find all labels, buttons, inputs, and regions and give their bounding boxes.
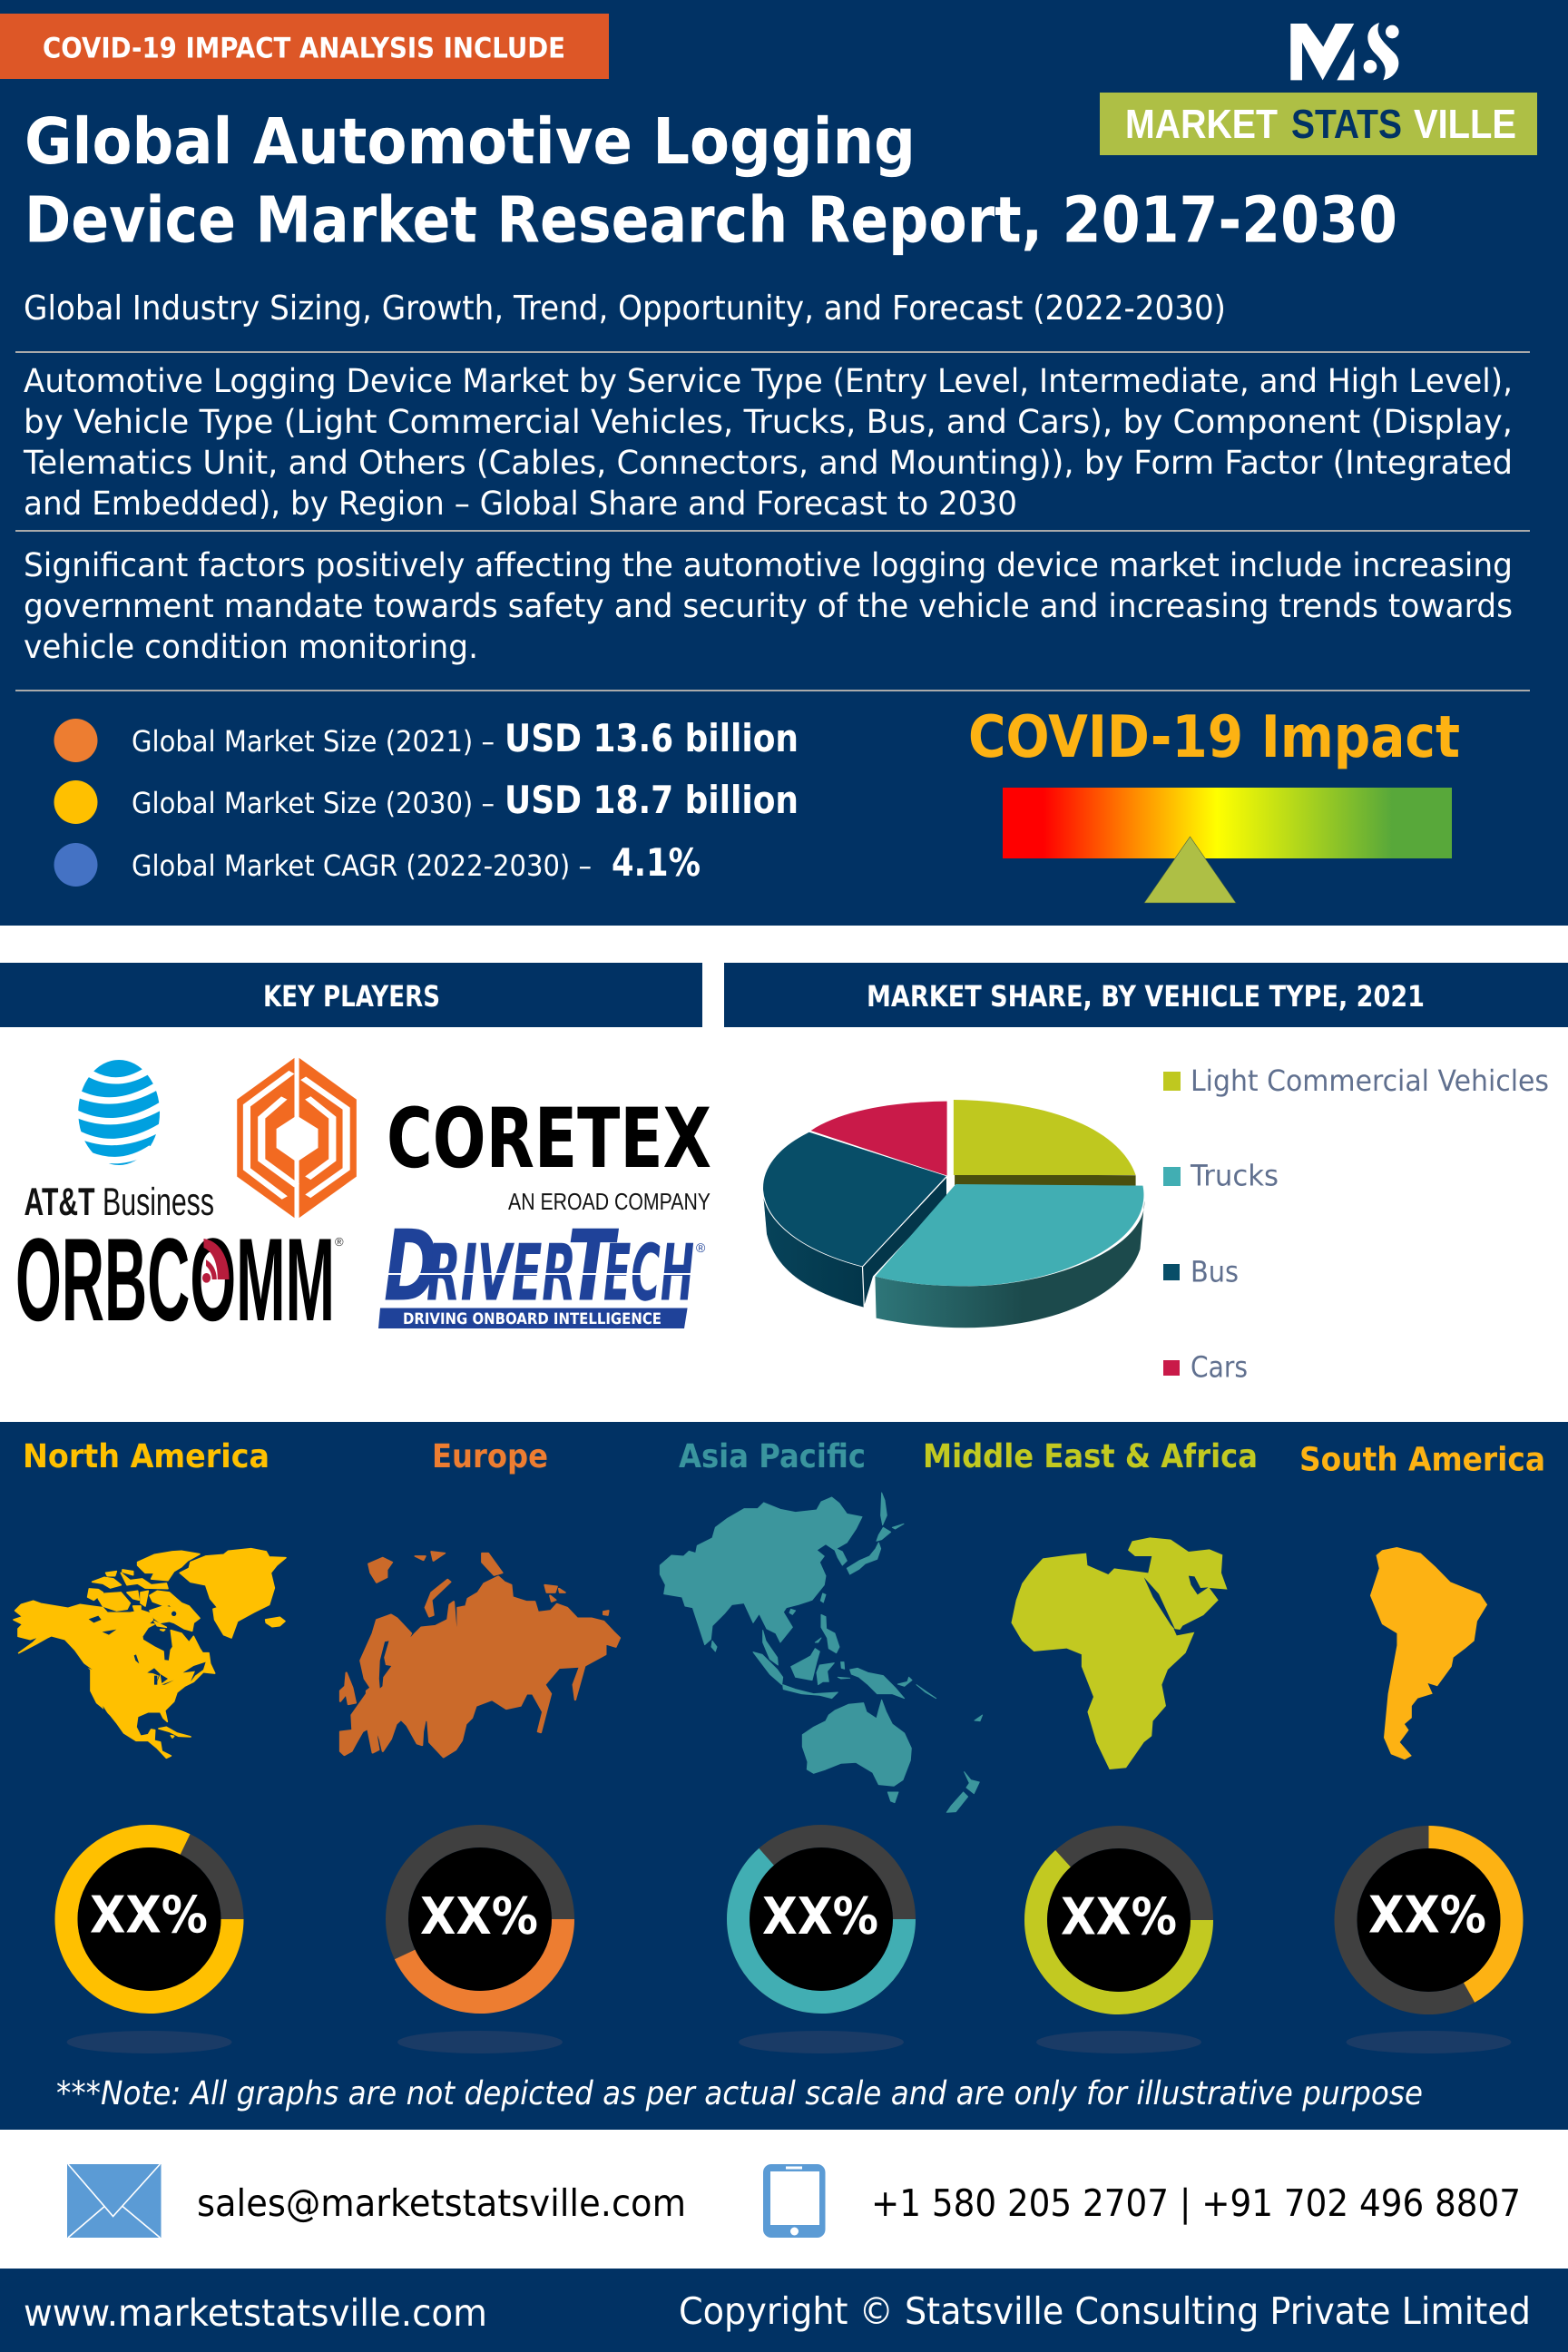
AT&T wordmark: AT&T (24, 1181, 94, 1224)
stat: market size 2030: USD 18.7 billion (505, 778, 799, 822)
text block: market drivers: vehicle condition monitoring. (24, 629, 478, 666)
label: South America: South America (1299, 1441, 1545, 1479)
stat: market size 2030 (54, 778, 799, 824)
legend: Cars (1163, 1350, 1248, 1385)
text block: segmentation description: Automotive Logging Device Market by Service Type (Entry Level, Intermediate, and High Level), (24, 363, 1513, 400)
logo wordmark: VILLE (1414, 101, 1516, 147)
orbcomm signal icon (202, 1239, 230, 1283)
subtitle: Global Industry Sizing, Growth, Trend, Opportunity, and Forecast (2022-2030) (24, 289, 1226, 328)
AT&T globe icon (72, 1060, 164, 1165)
legend: Trucks: Trucks (1190, 1158, 1279, 1192)
text block: segmentation description: and Embedded), by Region – Global Share and Forecast to 2030 (24, 485, 1017, 523)
donut: Europe (397, 1837, 563, 2053)
logo: Orbcomm (15, 1213, 344, 1346)
logo: AT&T Business: Business (103, 1181, 214, 1224)
stat: market size 2021: Global Market Size (2021) – (132, 724, 495, 759)
text block: market drivers: government mandate towards safety and security of the vehicle and increasing trends towards (24, 588, 1513, 625)
donut: Middle East and Africa (1036, 1837, 1201, 2053)
contact panel (0, 2130, 1568, 2269)
slice: Bus (762, 1132, 947, 1308)
label: Middle East & Africa: Middle East & Africa (923, 1438, 1258, 1475)
donut: North America (66, 1837, 232, 2053)
text block: segmentation description: by Vehicle Type (Light Commercial Vehicles, Trucks, Bus, and Cars), by Component (Display, (24, 404, 1513, 441)
logo: Market Stats Ville (1100, 23, 1537, 155)
regional panel background (0, 1422, 1568, 2130)
donut: Middle East and Africa: XX% (1061, 1887, 1177, 1947)
logo: DriverTech: RIVER (426, 1229, 576, 1319)
slice: Light Commercial Vehicles (954, 1100, 1136, 1186)
donut: Asia Pacific: XX% (762, 1887, 878, 1946)
map: South America (1370, 1547, 1487, 1759)
stat: CAGR (54, 840, 701, 887)
text block: segmentation description: Telematics Unit, and Others (Cables, Connectors, and Mounting)), by Form Factor (Integrated (23, 445, 1513, 482)
text block: segmentation description (23, 363, 1513, 523)
logo: DriverTech: D (384, 1210, 438, 1323)
logo: Orbcomm: ORBCOMM (15, 1213, 335, 1346)
gauge pointer (1144, 837, 1236, 903)
COVID-19 badge (0, 14, 609, 79)
stat: CAGR: Global Market CAGR (2022-2030) – (132, 848, 592, 883)
logo: Coretex: AN EROAD COMPANY (508, 1188, 710, 1215)
label: North America: North America (23, 1438, 270, 1475)
stat: CAGR: 4.1% (612, 840, 701, 885)
website: www.marketstatsville.com (24, 2291, 487, 2335)
logo: DriverTech (378, 1210, 706, 1328)
text block: market drivers: Significant factors positively affecting the automotive logging device market include increasing (24, 547, 1513, 584)
label: Asia Pacific: Asia Pacific (679, 1438, 866, 1475)
pie legend (1163, 1063, 1549, 1385)
label: Europe: Europe (432, 1438, 548, 1475)
email address: sales@marketstatsville.com (197, 2181, 686, 2225)
donut: Europe: XX% (420, 1887, 538, 1946)
donut: Asia Pacific (739, 1837, 904, 2053)
legend: Bus: Bus (1191, 1254, 1239, 1289)
donut: North America: XX% (90, 1886, 208, 1945)
stat: market size 2030: Global Market Size (2030) – (132, 786, 495, 820)
legend: Cars: Cars (1191, 1350, 1248, 1385)
logo: orange hexagon (237, 1053, 357, 1223)
header background panel (0, 0, 1568, 926)
COVID-19 impact gauge (968, 704, 1460, 903)
logo wordmark (1100, 93, 1537, 155)
logo: DriverTech: ECH (603, 1229, 694, 1319)
title (24, 104, 1397, 258)
map: Asia Pacific (660, 1493, 983, 1812)
map: North America (14, 1549, 286, 1758)
logo: AT&T Business (24, 1060, 214, 1224)
text block: market drivers (24, 547, 1513, 666)
logo: DriverTech: T (567, 1210, 619, 1323)
key players heading (0, 963, 702, 1027)
phone numbers: +1 580 205 2707 | +91 702 496 8807 (871, 2181, 1521, 2225)
map: Europe and Russia (340, 1552, 620, 1758)
gauge heading: COVID-19 Impact (968, 704, 1460, 771)
gauge gradient bar (1003, 788, 1452, 858)
COVID-19 badge: COVID-19 IMPACT ANALYSIS INCLUDE (43, 33, 565, 65)
market share heading (724, 963, 1568, 1027)
logo wordmark: STATS (1291, 101, 1402, 147)
logo: Coretex (387, 1092, 711, 1215)
stat: market size 2021: USD 13.6 billion (505, 716, 799, 760)
donut: South America (1346, 1837, 1512, 2053)
title: Global Automotive Logging (24, 104, 916, 179)
logo: DriverTech: ® (696, 1240, 706, 1255)
footer bar (0, 2269, 1568, 2352)
icon: envelope (67, 2164, 162, 2238)
title: Device Market Research Report, 2017-2030 (24, 183, 1397, 258)
icon: phone (763, 2164, 826, 2238)
logo mark MS (1290, 23, 1399, 80)
logo: Coretex: CORETEX (387, 1092, 711, 1187)
stat: market size 2021 (54, 716, 799, 762)
note: ***Note: All graphs are not depicted as per actual scale and are only for illustrative purpose (56, 2075, 1423, 2112)
logo wordmark: MARKET (1125, 101, 1278, 147)
3D pie chart: market share by vehicle type (762, 1100, 1144, 1328)
donut: South America: XX% (1368, 1886, 1486, 1945)
map: Middle East and Africa (1011, 1537, 1228, 1769)
logo: DriverTech: DRIVING ONBOARD INTELLIGENCE (403, 1310, 662, 1328)
market share heading: MARKET SHARE, BY VEHICLE TYPE, 2021 (867, 979, 1425, 1014)
copyright: Copyright © Statsville Consulting Private Limited (679, 2289, 1531, 2333)
slice: Trucks (875, 1184, 1144, 1328)
market stats list (54, 716, 799, 887)
logo: Orbcomm: ® (335, 1235, 344, 1249)
legend: Bus (1163, 1254, 1239, 1289)
legend: Light Commercial Vehicles: Light Commercial Vehicles (1191, 1063, 1549, 1098)
slice: Cars (811, 1102, 947, 1176)
key players heading: KEY PLAYERS (263, 979, 440, 1014)
